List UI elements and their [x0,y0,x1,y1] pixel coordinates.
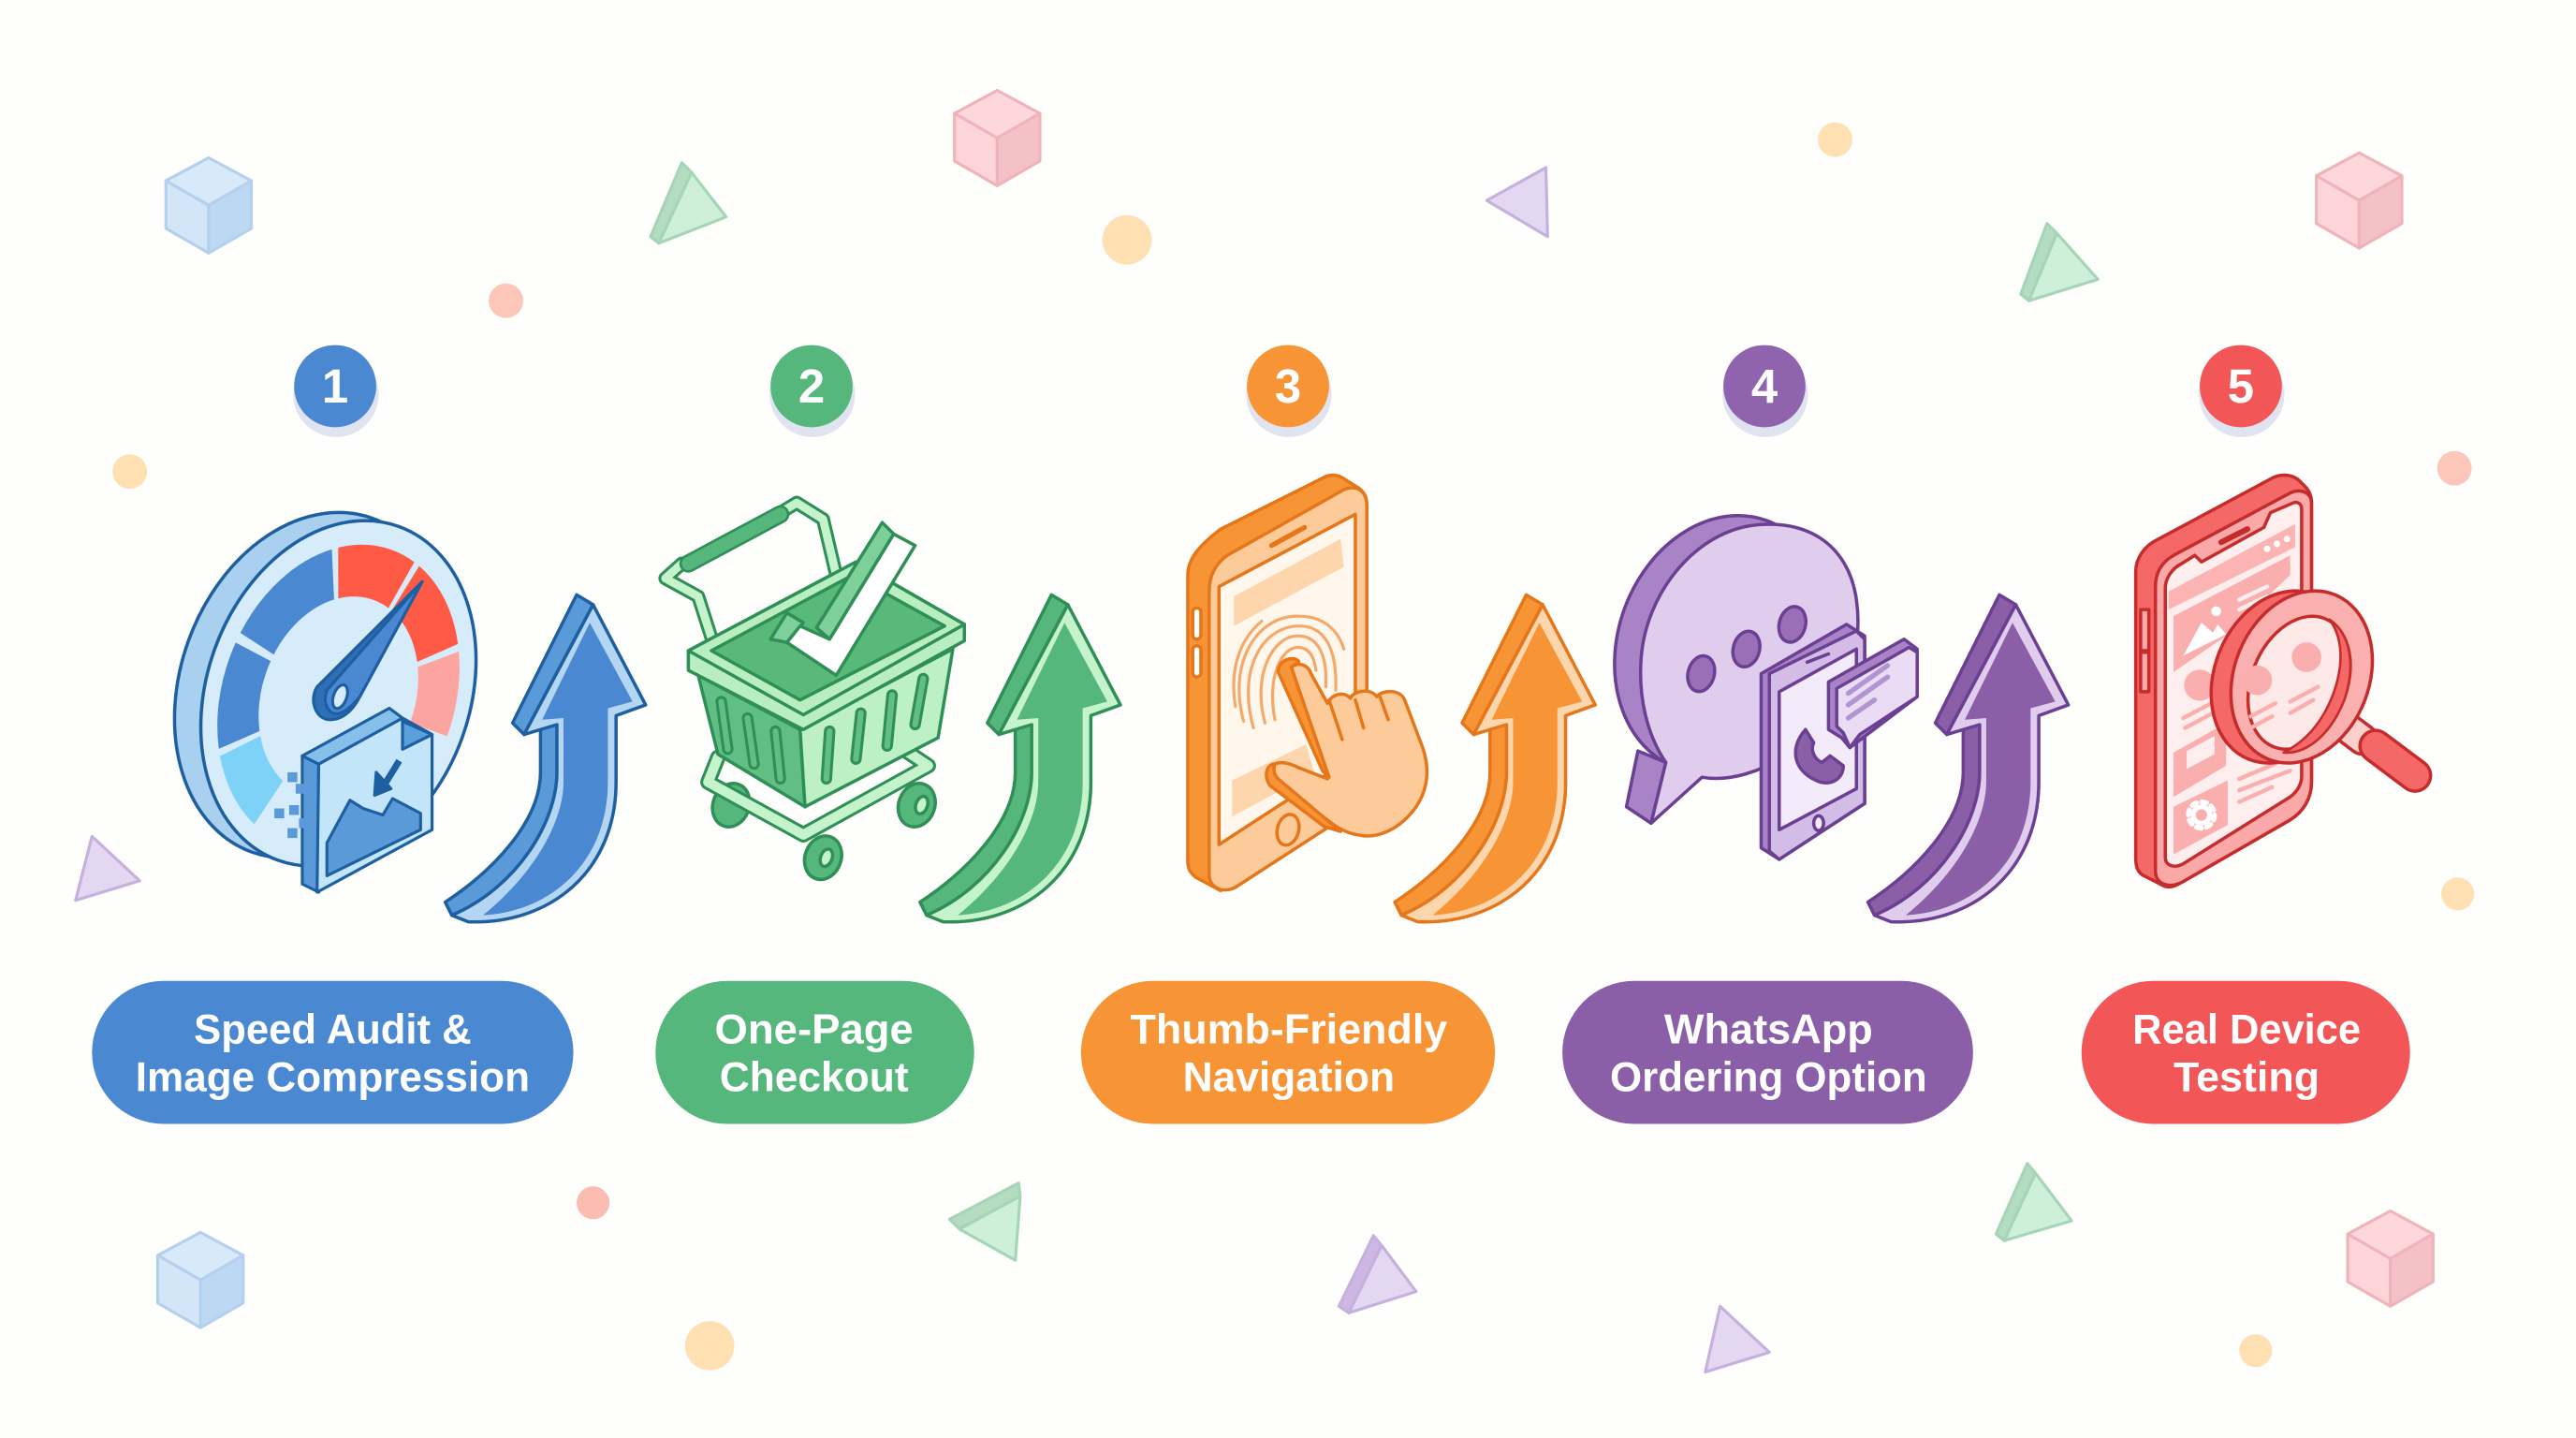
label pill: step 4: WhatsApp [1664,1005,1873,1052]
step 1 number badge [293,345,379,437]
pyramid: green top right [2021,224,2098,301]
fingerprint [1234,616,1344,728]
cart wheels and frame [707,753,942,885]
cube: blue top left [166,157,252,253]
phone body [1188,476,1367,890]
label pill: step 1: Speed Audit & [194,1005,472,1052]
label pill: step 4: Ordering Option [1610,1053,1927,1100]
step 4 number badge [1722,345,1808,437]
icon: phone with thumb tapping [1188,476,1427,890]
cube: pink top right [2317,153,2402,248]
step 2 number badge [769,345,856,437]
step 5 number badge: 5 [2228,360,2254,413]
gauge needle [314,581,422,720]
step 3 number badge [1246,345,1332,437]
label pill: step 3: Navigation [1183,1053,1395,1100]
pyramid: green top left [651,163,726,243]
pyramid: purple top centre [1486,168,1547,237]
label pill: step 5 [2082,981,2410,1123]
label pill: step 1 [92,981,574,1123]
red phone [2136,476,2311,887]
icon: speedometer with compressed image [128,474,522,905]
pyramid: purple bottom right [1705,1306,1769,1372]
magnifying glass [2187,569,2415,785]
pyramid: purple bottom centre [1339,1236,1416,1313]
arrow: orange growth [1395,594,1595,922]
step 2 number badge: 2 [798,360,825,413]
icon: phone under magnifying glass [2136,476,2415,887]
cart basket [688,562,964,807]
icon: chat bubble with phone [1579,485,1917,859]
step 3 number badge: 3 [1275,360,1301,413]
arrow: purple growth [1868,594,2069,922]
label pill: step 2 [655,981,974,1123]
pyramid: green bottom right [1996,1164,2071,1240]
pyramid: purple left [76,836,139,901]
label pill: step 5: Testing [2174,1053,2320,1100]
label pill: step 4 [1562,981,1973,1123]
cart handle [666,503,836,638]
cube: blue bottom left [157,1232,243,1328]
arrow: blue growth [446,594,646,922]
label pill: step 3 [1081,981,1495,1123]
label pill: step 1: Image Compression [136,1053,530,1100]
label pill: step 2: Checkout [720,1053,909,1100]
gauge disc [128,474,522,905]
label pill: step 5: Real Device [2132,1005,2361,1052]
step 4 number badge: 4 [1751,360,1778,413]
pointing hand [1266,659,1427,836]
compressed image file [274,708,432,892]
label pill: step 3: Thumb-Friendly [1131,1005,1447,1052]
checkmark [770,522,915,675]
step 1 number badge: 1 [322,360,348,413]
phone screen content [2169,524,2295,855]
arrow: green growth [920,594,1120,922]
speech bubble [1579,485,1864,823]
pyramid: green bottom centre [949,1183,1020,1260]
cube: pink bottom right [2348,1211,2433,1306]
step 5 number badge [2199,345,2284,437]
message bubble [1828,639,1917,748]
dots [112,123,2474,1371]
label pill: step 2: One-Page [714,1005,914,1052]
cube: pink top centre [955,91,1040,185]
small phone [1761,624,1865,859]
icon: shopping cart with checkmark [666,503,964,885]
